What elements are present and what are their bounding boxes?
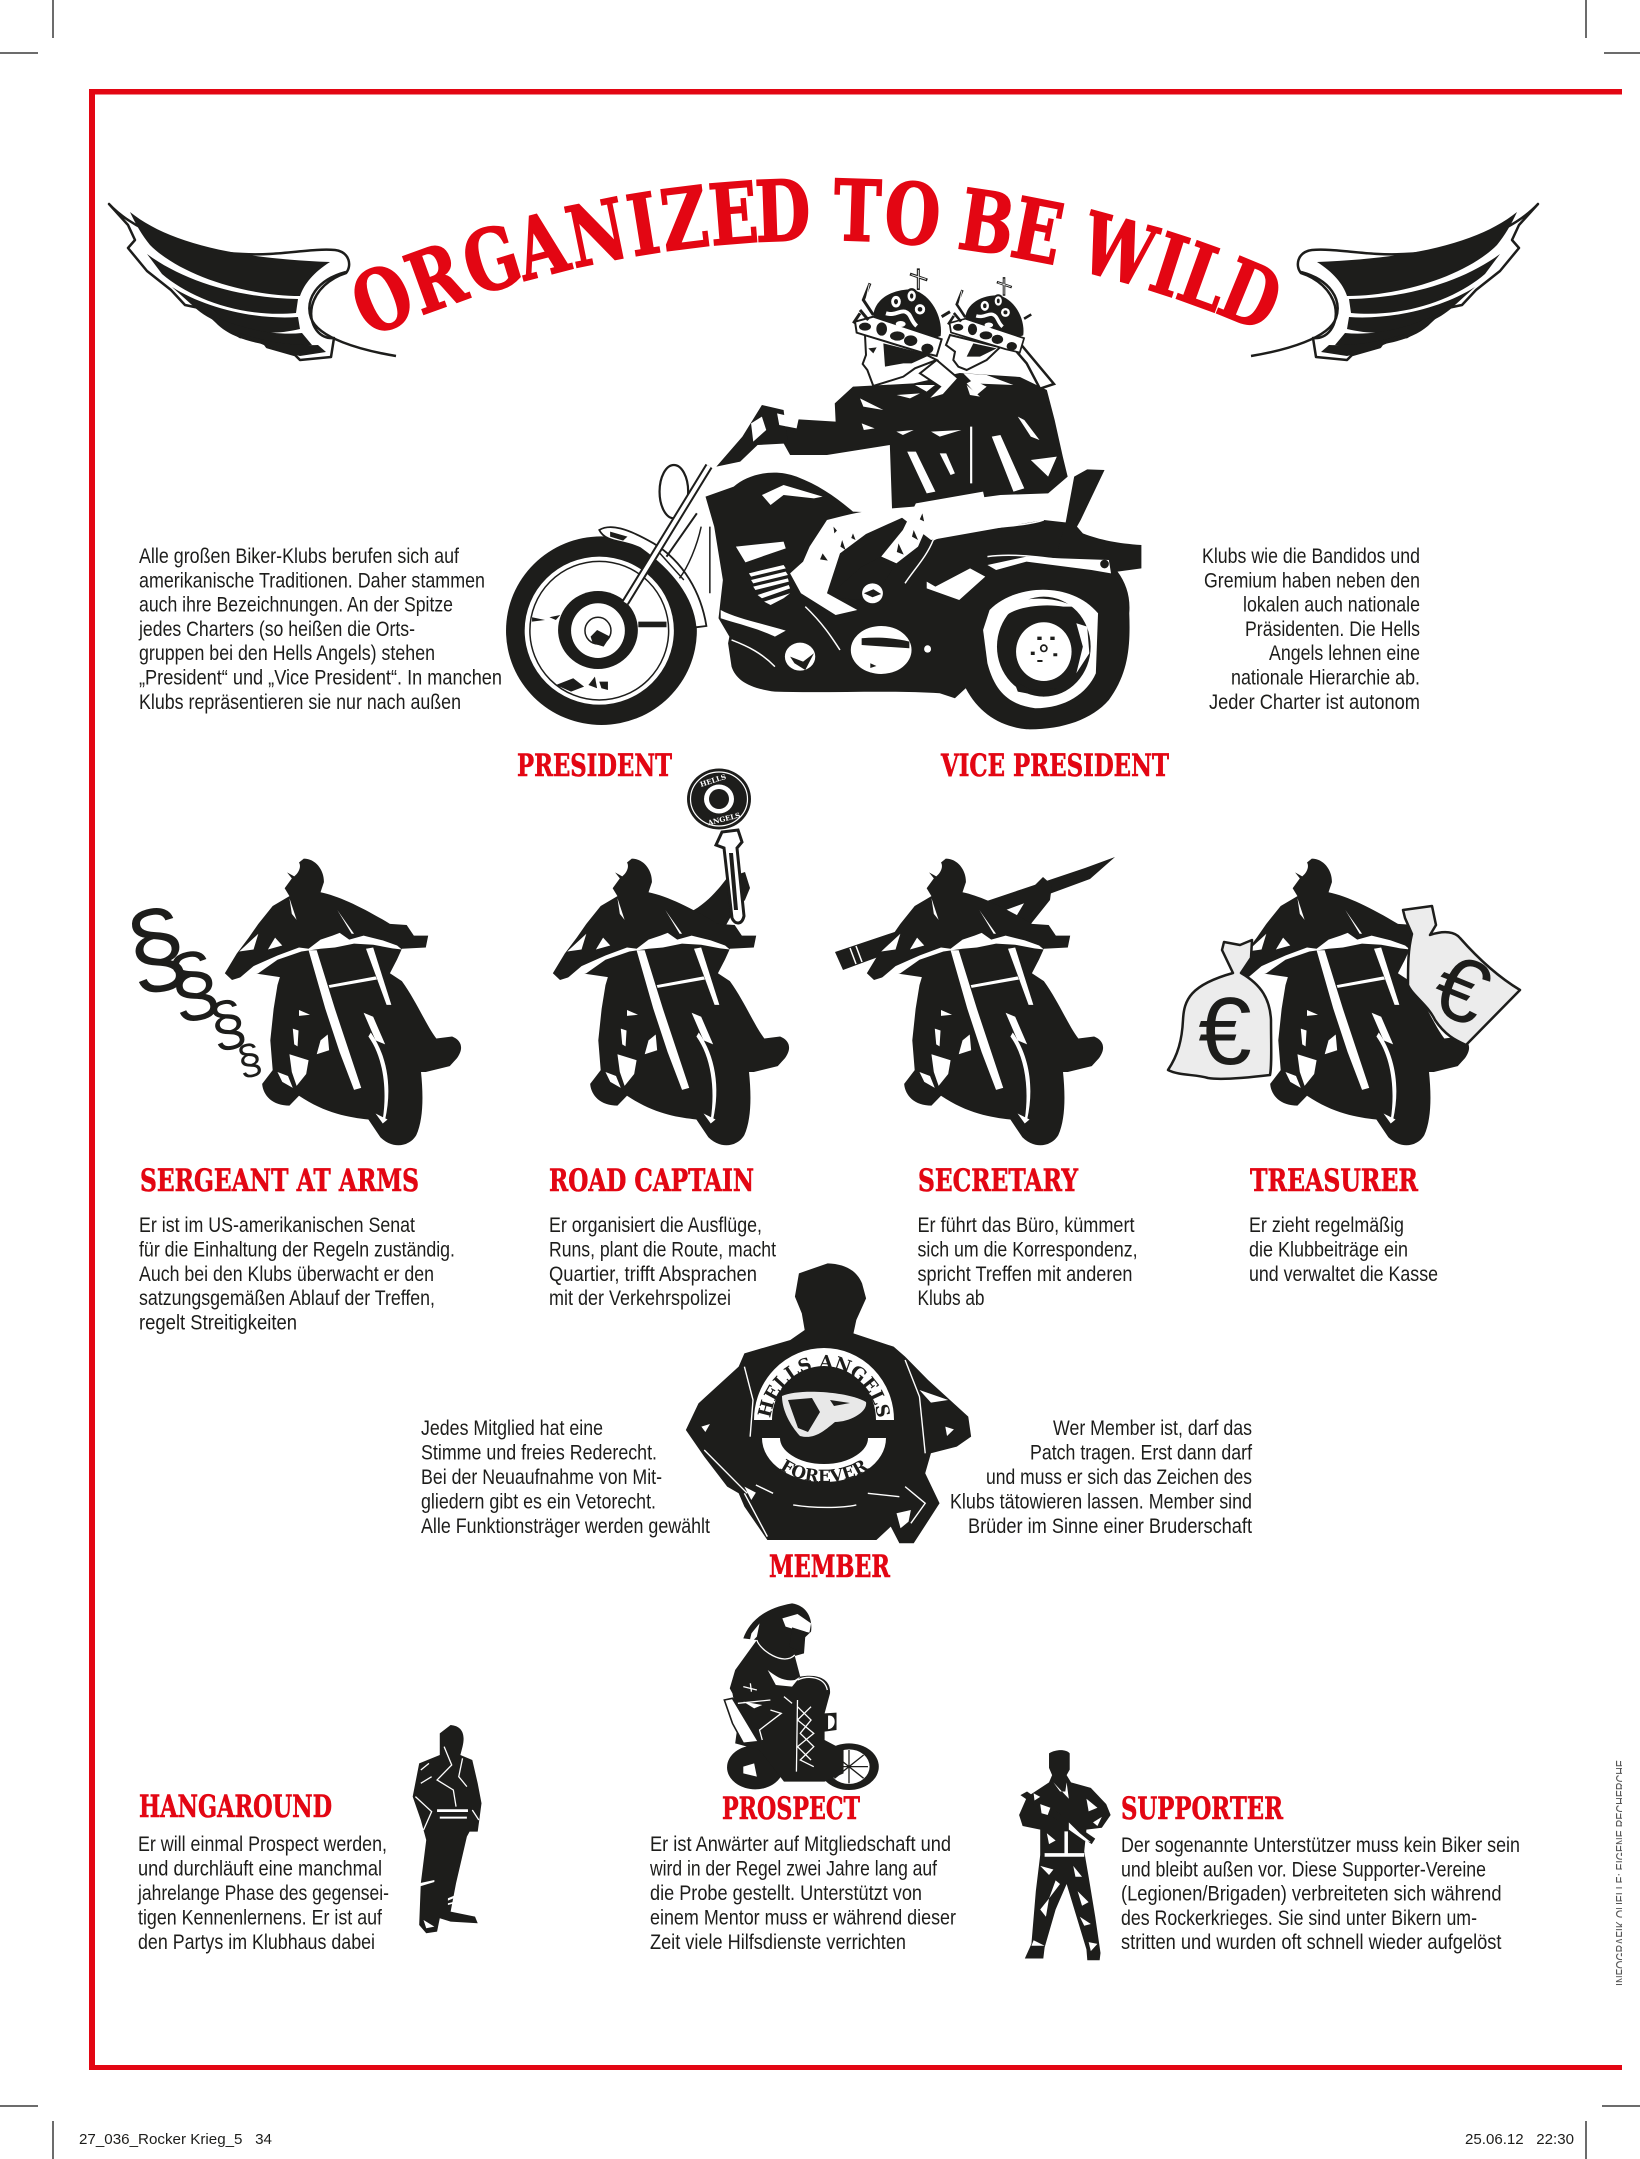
illustration: president and vice president on motorcycle: [506, 268, 1141, 729]
title: D: [1206, 239, 1295, 352]
text: sergeant at arms: für die Einhaltung der Regeln zuständig.: [139, 1238, 455, 1261]
motorcycle: [506, 405, 1141, 729]
text: road captain: Er organisiert die Ausflüge,: [549, 1214, 762, 1237]
illustration: sergeant at arms: [118, 859, 461, 1145]
intro text left: [138, 545, 502, 714]
money bag left: €: [1198, 978, 1252, 1085]
icon: paragraph signs: [118, 886, 266, 1085]
heading: treasurer: TREASURER: [1250, 1163, 1418, 1199]
text: member right: Patch tragen. Erst dann darf: [1030, 1442, 1252, 1464]
illustration: road captain: [553, 768, 789, 1145]
illustration: secretary: [835, 857, 1115, 1145]
text: sergeant at arms: regelt Streitigkeiten: [139, 1312, 297, 1335]
intro text right: Angels lehnen eine: [1269, 642, 1420, 665]
text: prospect: einem Mentor muss er während dieser: [650, 1906, 956, 1930]
text: treasurer: Er zieht regelmäßig: [1249, 1214, 1404, 1237]
heading: member: MEMBER: [769, 1549, 890, 1585]
patch: top rocker: HELLS ANGELS: [757, 1354, 890, 1418]
crown: president: [853, 268, 950, 356]
heading: prospect: PROSPECT: [722, 1791, 860, 1827]
intro text left: gruppen bei den Hells Angels) stehen: [139, 642, 435, 665]
text: hangaround: den Partys im Klubhaus dabei: [138, 1931, 375, 1954]
text: member left: Bei der Neuaufnahme von Mit-: [421, 1466, 662, 1489]
title: O: [881, 163, 944, 266]
money bag left: [1168, 940, 1271, 1085]
intro text left: auch ihre Bezeichnungen. An der Spitze: [139, 594, 453, 617]
title: O: [338, 243, 427, 356]
text: member right: Brüder im Sinne einer Bruderschaft: [968, 1515, 1252, 1538]
heading: president: PRESIDENT: [517, 748, 672, 784]
text: road captain: [549, 1214, 776, 1310]
intro text left: amerikanische Traditionen. Daher stammen: [139, 569, 485, 592]
text: hangaround: und durchläuft eine manchmal: [138, 1858, 382, 1880]
rider torsos: [779, 373, 1068, 508]
title: A: [504, 192, 578, 301]
biker: [225, 859, 461, 1145]
title: [338, 161, 1295, 356]
signal paddle: ANGELS: [706, 811, 741, 828]
heading: supporter: SUPPORTER: [1121, 1791, 1283, 1827]
illustration: treasurer: [1168, 859, 1520, 1145]
title: Z: [655, 167, 714, 271]
intro text right: nationale Hierarchie ab.: [1231, 666, 1420, 690]
text: road captain: mit der Verkehrspolizei: [549, 1287, 731, 1310]
title: G: [451, 205, 532, 315]
text: member left: gliedern gibt es ein Vetorecht.: [421, 1490, 656, 1514]
intro text left: jedes Charters (so heißen die Orts-: [138, 618, 415, 641]
text: secretary: [918, 1214, 1138, 1310]
money bag right: [1403, 906, 1520, 1046]
title: W: [1070, 193, 1167, 308]
text: member left: Alle Funktionsträger werden gewählt: [421, 1515, 710, 1538]
text: secretary: Er führt das Büro, kümmert: [918, 1214, 1135, 1237]
text: prospect: die Probe gestellt. Unterstützt von: [650, 1882, 922, 1905]
intro text right: Präsidenten. Die Hells: [1245, 618, 1420, 641]
text: treasurer: und verwaltet die Kasse: [1249, 1263, 1438, 1286]
text: supporter: des Rockerkrieges. Sie sind unter Bikern um-: [1121, 1907, 1477, 1930]
rider heads and crowns: [853, 268, 1054, 410]
illustration: prospect on mini chopper: [724, 1603, 879, 1790]
text: prospect: Zeit viele Hilfsdienste verrichten: [650, 1931, 906, 1954]
text: hangaround: Er will einmal Prospect werden,: [138, 1833, 387, 1856]
crown: vice president: [948, 277, 1031, 353]
icon: paragraph signs: §: [118, 886, 195, 1011]
intro text right: Gremium haben neben den: [1204, 569, 1420, 592]
text: prospect: wird in der Regel zwei Jahre lang auf: [649, 1858, 937, 1880]
intro text right: Klubs wie die Bandidos und: [1202, 545, 1420, 568]
intro text left: Alle großen Biker-Klubs berufen sich auf: [139, 545, 459, 568]
illustration: supporter with rifle: [1019, 1750, 1111, 1960]
text: secretary: spricht Treffen mit anderen: [918, 1263, 1132, 1286]
footer slug right: 25.06.12 22:30: [1465, 2132, 1574, 2148]
biker: [867, 859, 1103, 1145]
text: prospect: [649, 1833, 956, 1954]
text: secretary: Klubs ab: [918, 1287, 984, 1310]
title: I: [621, 174, 666, 276]
heading: vice president: VICE PRESIDENT: [940, 748, 1169, 784]
title: E: [1004, 178, 1071, 285]
text: member right: Wer Member ist, darf das: [1053, 1417, 1252, 1440]
title: D: [753, 161, 812, 262]
text: member left: Jedes Mitglied hat eine: [421, 1417, 603, 1440]
text: treasurer: die Klubbeiträge ein: [1249, 1238, 1408, 1261]
raised arm: [690, 872, 750, 945]
text: member right: [950, 1417, 1252, 1538]
text: treasurer: [1249, 1214, 1438, 1286]
title: E: [705, 163, 762, 266]
icon: paragraph signs: §: [160, 933, 227, 1037]
text: sergeant at arms: satzungsgemäßen Ablauf der Treffen,: [139, 1287, 435, 1310]
text: supporter: stritten und wurden oft schnell wieder aufgelöst: [1121, 1931, 1502, 1954]
title: L: [1167, 223, 1242, 332]
title: B: [953, 170, 1021, 276]
text: supporter: Der sogenannte Unterstützer muss kein Biker sein: [1121, 1834, 1520, 1857]
text: sergeant at arms: [139, 1214, 455, 1335]
text: prospect: Er ist Anwärter auf Mitgliedschaft und: [650, 1833, 951, 1856]
right wing: [1251, 204, 1538, 360]
patch: bottom rocker: [762, 1438, 886, 1482]
icon: paragraph signs: §: [204, 987, 252, 1062]
title: I: [1140, 214, 1199, 317]
money bag right: €: [1419, 934, 1503, 1046]
text: hangaround: [137, 1833, 389, 1954]
raised arm: [1017, 877, 1052, 945]
signal paddle: HELLS: [699, 772, 727, 789]
text: sergeant at arms: Er ist im US-amerikanischen Senat: [139, 1214, 415, 1237]
left wing: [109, 204, 396, 360]
patch: death head: [782, 1392, 866, 1437]
text: secretary: sich um die Korrespondenz,: [918, 1238, 1138, 1261]
text: member left: [421, 1417, 710, 1538]
heading: sergeant at arms: SERGEANT AT ARMS: [140, 1163, 419, 1199]
footer slug left: 27_036_Rocker Krieg_5 34: [79, 2132, 272, 2148]
source note vertical: [1613, 1750, 1640, 1995]
text: sergeant at arms: Auch bei den Klubs überwacht er den: [139, 1263, 434, 1286]
text: supporter: und bleibt außen vor. Diese Supporter-Vereine: [1121, 1858, 1486, 1881]
title: R: [394, 223, 478, 334]
intro text right: lokalen auch nationale: [1243, 594, 1420, 617]
text: hangaround: tigen Kennenlernens. Er ist auf: [138, 1906, 382, 1930]
heading: hangaround: HANGAROUND: [139, 1789, 332, 1825]
intro text left: „President“ und „Vice President“. In manchen: [139, 666, 502, 690]
icon: paragraph signs: §: [233, 1034, 266, 1085]
illustration: member with patch jacket: [686, 1263, 972, 1544]
illustration: hangaround: [413, 1725, 482, 1933]
source note vertical: INFOGRAFIK QUELLE: EIGENE RECHERCHE: [1613, 1760, 1630, 1986]
title: T: [832, 161, 883, 262]
patch: bottom rocker: FOREVER: [780, 1458, 869, 1482]
title: N: [558, 179, 635, 288]
text: supporter: (Legionen/Brigaden) verbreiteten sich während: [1121, 1883, 1502, 1906]
text: member right: Klubs tätowieren lassen. Member sind: [950, 1490, 1252, 1514]
pencil: [835, 857, 1115, 970]
face: vice president: [946, 335, 1000, 370]
intro text right: [1202, 545, 1420, 714]
heading: secretary: SECRETARY: [918, 1163, 1079, 1199]
intro text left: Klubs repräsentieren sie nur nach außen: [139, 691, 461, 714]
jacket silhouette: [686, 1263, 971, 1543]
biker: [1233, 859, 1469, 1145]
text: road captain: Runs, plant die Route, macht: [549, 1238, 776, 1261]
text: member right: und muss er sich das Zeichen des: [986, 1466, 1252, 1489]
text: hangaround: jahrelange Phase des gegensei-: [137, 1882, 389, 1905]
text: supporter: [1121, 1834, 1520, 1954]
heading: road captain: ROAD CAPTAIN: [549, 1163, 754, 1199]
text: road captain: Quartier, trifft Absprachen: [549, 1263, 757, 1286]
face: president: [863, 335, 937, 386]
biker: [553, 859, 789, 1145]
text: member left: Stimme und freies Rederecht.: [421, 1442, 657, 1464]
signal paddle: [687, 768, 751, 923]
intro text right: Jeder Charter ist autonom: [1209, 691, 1420, 714]
